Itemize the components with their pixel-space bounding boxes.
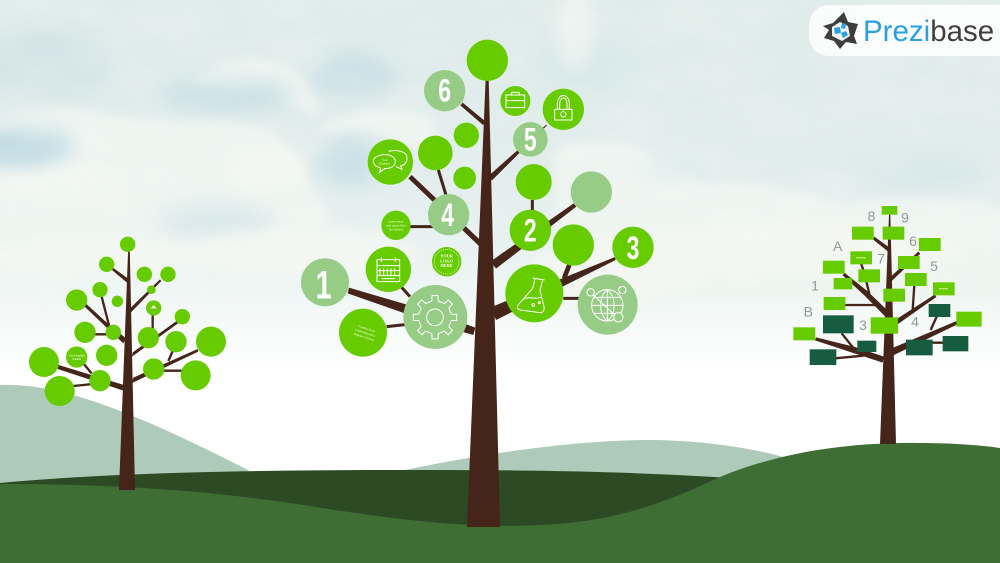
right tree boxes (793, 206, 982, 365)
circle: calendar icon (366, 247, 411, 292)
circle: plain medium (418, 136, 453, 170)
circle: padlock icon (543, 89, 584, 130)
circle: small text: Text Symbol (389, 227, 404, 231)
left tree small label: Your Headline (68, 355, 85, 358)
right tree labels: 9 (901, 209, 909, 225)
circle: text lower left: Creating Great (358, 325, 375, 333)
left tree circles (29, 237, 226, 406)
right tree labels: 5 (930, 258, 938, 274)
right tree labels: B (804, 304, 813, 320)
right tree labels: 7 (877, 250, 885, 266)
logo icon (823, 12, 858, 49)
circle: speech bubbles icon: Your (382, 159, 387, 162)
background: pale distant hills (0, 385, 800, 490)
circle: logo badge: HERE (441, 263, 453, 268)
circle: number 1 (301, 258, 349, 308)
right tree labels: A (833, 238, 843, 254)
circle: flask icon (505, 264, 563, 322)
circle: logo badge: YOUR (440, 254, 453, 259)
circle: speech bubbles icon: Business (379, 161, 391, 165)
right tree labels: 1 (811, 277, 819, 293)
circle: number 6 (424, 70, 465, 111)
circle: small text (381, 211, 411, 240)
background: dark green hill (0, 470, 760, 563)
circle: briefcase icon (500, 86, 530, 116)
circle: number 2: 2 (524, 213, 537, 249)
circle: globe icon (578, 275, 638, 335)
background: foreground green hill (0, 443, 1000, 563)
circle: logo badge (432, 247, 461, 276)
right tree trunk and branches (815, 215, 957, 444)
left tree (29, 237, 226, 490)
circle: logo badge: LOGO (440, 258, 454, 263)
main tree trunk (467, 78, 500, 527)
right tree labels: 3 (859, 317, 867, 333)
logo: Prezibase badge (809, 5, 1000, 56)
circle: pale plain (571, 171, 612, 213)
circle: text lower left: Diagram Concept (353, 332, 375, 342)
right tree (793, 206, 982, 444)
right tree labels: 6 (909, 233, 917, 249)
circle: number 5: 5 (524, 122, 537, 158)
circle: top (467, 40, 508, 81)
left tree trunk and branches (58, 245, 198, 490)
circle: small text: Lorem Ipsum (388, 220, 404, 223)
circle: plain lower right (553, 224, 594, 266)
right tree labels (804, 208, 938, 333)
circle: plain upper right (516, 164, 552, 200)
circle: number 3: 3 (627, 230, 639, 266)
left tree small label: Subtitle (72, 357, 82, 361)
right tree labels: 4 (911, 314, 919, 330)
circle: number 2 (510, 210, 551, 251)
circle: number 4 (428, 194, 469, 235)
circle: number 6: 6 (438, 73, 451, 109)
circle: small text: and Lorem Sum (387, 223, 406, 227)
main tree (301, 40, 654, 527)
circle: number 5 (513, 122, 548, 158)
circle: gear icon (403, 285, 467, 349)
right tree labels: 8 (867, 208, 875, 224)
circle: number 1: 1 (316, 263, 332, 308)
circle: number 3 (612, 227, 654, 268)
logo wordmark: Prezibase (863, 15, 994, 48)
main tree branches (348, 103, 616, 335)
circle: plain small (454, 123, 479, 148)
circle: speech bubbles icon (368, 139, 413, 185)
left tree icon (151, 305, 157, 308)
circle: number 4: 4 (441, 197, 454, 233)
circle: text lower left: Leadership with a (355, 328, 376, 338)
circle: plain small lower (453, 167, 476, 189)
circle: text lower left (339, 309, 387, 357)
